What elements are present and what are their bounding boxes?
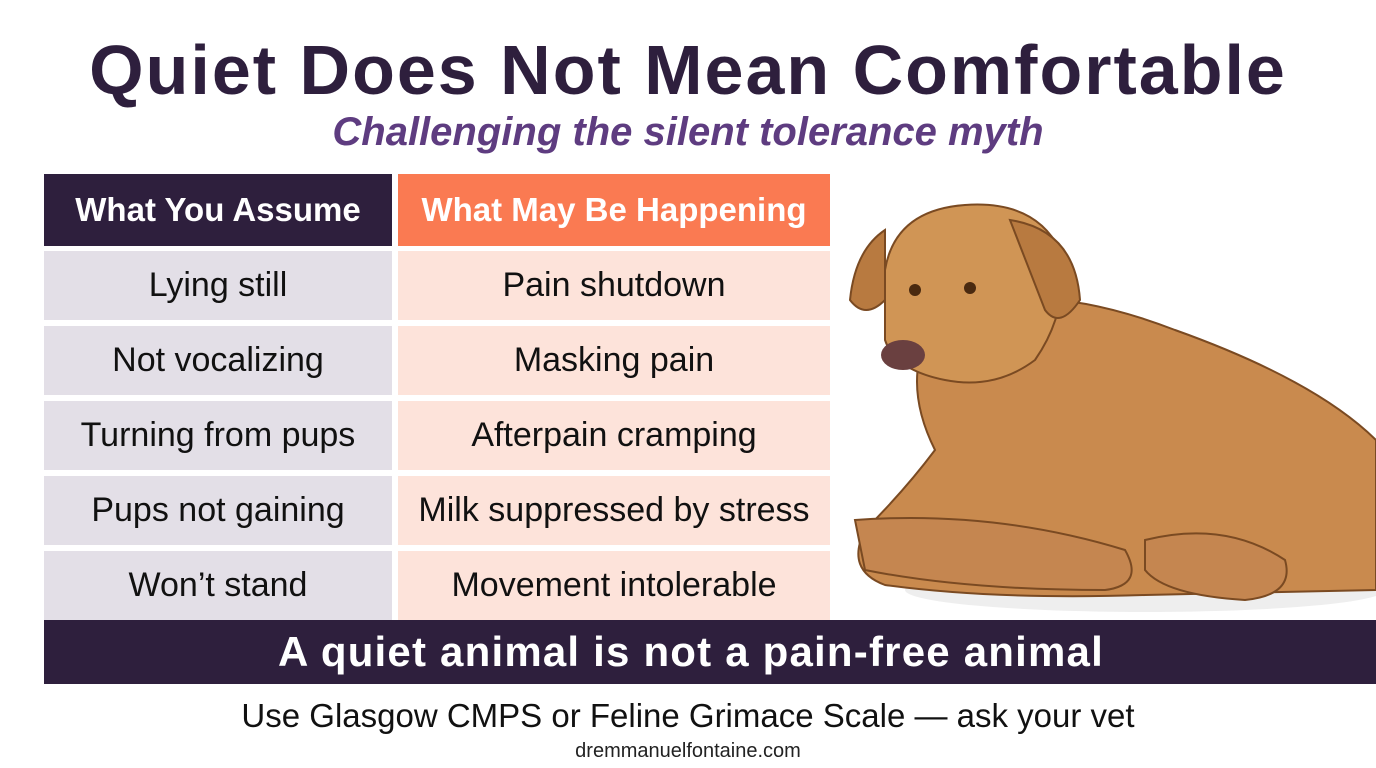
row 4 xyxy=(44,476,830,545)
row 3: Turning from pups xyxy=(81,416,355,454)
website: dremmanuelfontaine.com xyxy=(575,740,801,762)
row 3 xyxy=(44,401,830,470)
banner xyxy=(44,620,1376,684)
row 5 xyxy=(44,551,830,620)
row 3: Afterpain cramping xyxy=(471,416,757,454)
header: happening: What May Be Happening xyxy=(421,191,807,228)
header: assume: What You Assume xyxy=(75,191,361,228)
row 1: Lying still xyxy=(149,266,287,304)
table xyxy=(44,174,830,246)
header: happening xyxy=(398,174,830,246)
row 2: Not vocalizing xyxy=(112,341,324,379)
row 5: Movement intolerable xyxy=(451,566,777,604)
footer note: Use Glasgow CMPS or Feline Grimace Scale — ask your vet xyxy=(241,697,1135,734)
subtitle: Challenging the silent tolerance myth xyxy=(332,110,1044,154)
row 5: Won’t stand xyxy=(129,566,307,604)
row 1 xyxy=(44,251,830,320)
banner: A quiet animal is not a pain-free animal xyxy=(278,628,1104,675)
illustration: dog xyxy=(849,204,1376,612)
title: Quiet Does Not Mean Comfortable xyxy=(89,31,1287,109)
row 2: Masking pain xyxy=(514,341,714,379)
row 4: Milk suppressed by stress xyxy=(418,491,810,529)
row 1: Pain shutdown xyxy=(502,266,726,304)
row 4: Pups not gaining xyxy=(91,491,345,529)
header: assume xyxy=(44,174,392,246)
row 2 xyxy=(44,326,830,395)
